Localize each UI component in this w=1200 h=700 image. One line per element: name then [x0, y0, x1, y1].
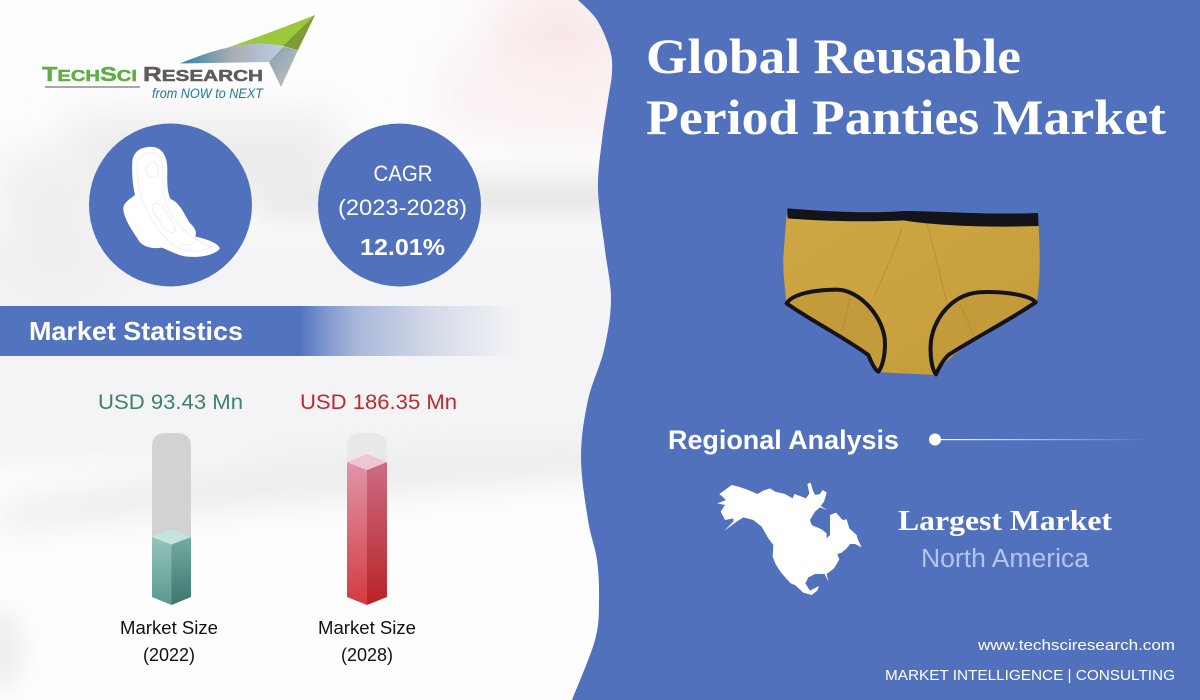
title	[646, 28, 1166, 145]
right blue panel	[572, 0, 1200, 700]
largest market text: North America	[921, 545, 1090, 573]
footer tagline: MARKET INTELLIGENCE | CONSULTING	[885, 667, 1175, 684]
bar 2028	[347, 433, 387, 605]
largest market text: Largest Market	[898, 505, 1112, 537]
CAGR circle: CAGR	[374, 161, 432, 186]
2022 value label: USD 93.43 Mn	[98, 390, 243, 414]
title: Global Reusable	[646, 28, 1021, 84]
market statistics band	[0, 306, 525, 356]
regional analysis heading: Regional Analysis	[668, 425, 899, 455]
largest market text	[898, 505, 1112, 573]
label: market size 2022: Market Size	[120, 618, 218, 638]
logo: TechSci Research: from NOW to NEXT	[152, 86, 265, 101]
bar 2022	[152, 433, 191, 605]
image: period panties	[783, 208, 1040, 375]
label: market size 2022	[120, 618, 218, 665]
label: market size 2028: Market Size	[318, 618, 416, 638]
CAGR circle	[318, 124, 481, 286]
CAGR circle: 12.01%	[360, 234, 445, 260]
2028 value label: USD 186.35 Mn	[300, 390, 457, 414]
timeline dot and line	[929, 434, 1150, 446]
logo: TechSci Research: TECH SCI	[42, 64, 137, 86]
left panel background	[0, 0, 640, 700]
logo: TechSci Research	[42, 15, 315, 101]
CAGR circle: (2023-2028)	[338, 195, 467, 220]
market statistics band: Market Statistics	[29, 316, 243, 346]
label: market size 2022: (2022)	[143, 645, 195, 665]
icon: sanitary pad in circle	[89, 124, 252, 286]
label: market size 2028	[318, 618, 416, 665]
footer website: www.techsciresearch.com	[977, 637, 1175, 654]
map: North America	[717, 483, 862, 595]
title: Period Panties Market	[646, 89, 1166, 145]
logo: TechSci Research: R ESEARCH	[143, 64, 263, 86]
label: market size 2028: (2028)	[341, 645, 393, 665]
